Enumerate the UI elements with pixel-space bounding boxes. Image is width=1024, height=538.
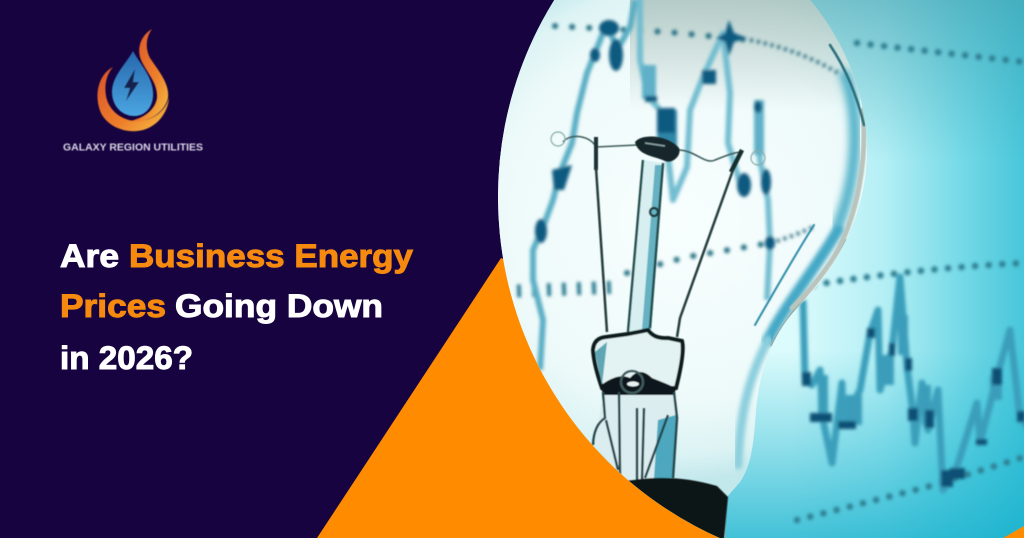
chart inside bulb	[517, 0, 838, 370]
small ring	[650, 208, 658, 216]
dotted gridlines right	[797, 43, 1024, 520]
pinch centre	[601, 371, 676, 396]
top knob	[635, 136, 680, 162]
bulb stem and filament	[551, 132, 765, 538]
photo backdrop	[490, 0, 1024, 538]
support wires	[594, 137, 598, 170]
logo flame: right tongue	[130, 29, 168, 122]
candle blobs inside bulb	[535, 20, 775, 250]
headline line 2: Prices	[60, 288, 166, 324]
glass edge bands	[738, 45, 864, 465]
pinch seal	[593, 330, 683, 388]
logo flame: outer crescent	[97, 67, 169, 131]
photo: light bulb over price chart	[498, 0, 1024, 538]
orange triangle	[317, 258, 760, 538]
lower tube	[595, 395, 677, 480]
headline line 2: Going Down	[175, 288, 383, 324]
headline	[60, 238, 413, 376]
chart outside bulb	[797, 43, 1024, 520]
top shading	[630, 0, 856, 94]
price line right	[803, 277, 1024, 490]
glass stem	[628, 160, 663, 332]
headline line 3: in 2026?	[60, 340, 193, 376]
logo	[63, 29, 203, 154]
candle blobs right	[802, 328, 1024, 487]
metal base	[620, 478, 728, 538]
headline line 1: Business Energy	[129, 238, 413, 274]
orange corner	[1003, 526, 1024, 538]
logo brand name: GALAXY REGION UTILITIES	[63, 142, 203, 154]
bulb glass	[498, 0, 867, 538]
logo lightning bolt	[124, 69, 139, 101]
price bars right	[818, 315, 1002, 425]
headline line 1: Are	[60, 238, 119, 274]
contents seen through glass	[517, 0, 870, 465]
filament wire	[563, 136, 742, 161]
logo water drop	[112, 51, 153, 116]
